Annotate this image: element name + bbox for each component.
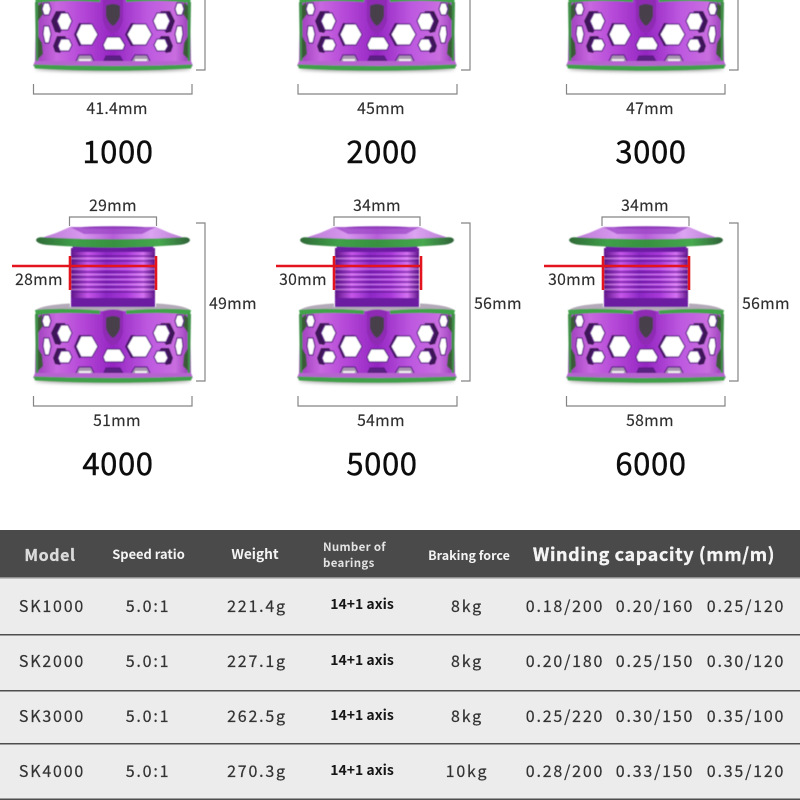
header: Weight: Weight xyxy=(231,543,279,563)
spool 6000 xyxy=(566,226,726,384)
specification table xyxy=(0,530,800,800)
row SK3000 xyxy=(19,703,785,727)
label 56mm spool 5000: 56mm xyxy=(474,291,522,314)
label 47mm: 47mm xyxy=(626,96,674,119)
row SK3000: 0.25/220 xyxy=(526,703,604,727)
label 56mm spool 6000: 56mm xyxy=(742,291,790,314)
label 28mm: 28mm xyxy=(15,267,63,290)
row SK4000: 5.0:1 xyxy=(126,758,170,782)
header: Number of bearings: bearings xyxy=(323,555,375,571)
row SK3000: 5.0:1 xyxy=(126,703,170,727)
label 49mm: 49mm xyxy=(209,291,257,314)
row SK4000: 0.35/120 xyxy=(707,758,785,782)
header: Speed ratio: Speed ratio xyxy=(112,544,185,563)
row SK2000: 5.0:1 xyxy=(126,648,170,672)
row SK4000: 0.33/150 xyxy=(616,758,694,782)
row SK1000: 5.0:1 xyxy=(126,593,170,617)
spool 4000 xyxy=(33,226,193,384)
row SK1000 xyxy=(19,593,785,617)
row SK1000: 0.18/200 xyxy=(526,593,604,617)
label 34mm spool 5000: 34mm xyxy=(353,193,401,216)
row SK3000: SK3000 xyxy=(19,703,85,727)
label 51mm: 51mm xyxy=(93,408,141,431)
header: Braking force: Braking force xyxy=(428,545,510,564)
heading 4000: 4000 xyxy=(82,439,154,484)
row SK4000: 10kg xyxy=(446,758,488,782)
row SK2000: 0.20/180 xyxy=(526,648,604,672)
row SK3000: 262.5g xyxy=(227,703,287,727)
row SK4000: SK4000 xyxy=(19,758,85,782)
header: Winding capacity: Winding capacity (mm/m) xyxy=(533,541,775,567)
row SK3000: 0.30/150 xyxy=(616,703,694,727)
heading 3000: 3000 xyxy=(615,127,687,172)
row SK4000 xyxy=(19,758,785,782)
heading 6000: 6000 xyxy=(615,439,687,484)
spool 2000 cropped at top xyxy=(297,0,457,72)
red measure lines xyxy=(12,256,689,290)
row SK1000: SK1000 xyxy=(19,593,85,617)
label 54mm: 54mm xyxy=(357,408,405,431)
heading 1000: 1000 xyxy=(82,127,154,172)
row SK2000: 8kg xyxy=(451,648,483,672)
label 30mm spool 6000: 30mm xyxy=(548,267,596,290)
header: Model: Model xyxy=(24,542,76,566)
label 29mm: 29mm xyxy=(89,193,137,216)
table header bar xyxy=(0,530,800,577)
row SK2000: 0.30/120 xyxy=(707,648,785,672)
spool 1000 cropped at top xyxy=(33,0,193,72)
row SK2000: 14+1 axis xyxy=(330,650,394,670)
row SK1000: 8kg xyxy=(451,593,483,617)
row SK4000: 14+1 axis xyxy=(330,760,394,780)
row SK2000: SK2000 xyxy=(19,648,85,672)
label 41.4mm: 41.4mm xyxy=(86,96,148,119)
header: Number of bearings: Number of xyxy=(323,539,386,555)
row SK1000: 14+1 axis xyxy=(330,594,394,614)
label 45mm: 45mm xyxy=(357,96,405,119)
heading 5000: 5000 xyxy=(346,439,418,484)
row SK1000: 0.20/160 xyxy=(616,593,694,617)
row SK2000: 0.25/150 xyxy=(616,648,694,672)
row SK1000: 0.25/120 xyxy=(707,593,785,617)
label 34mm spool 6000: 34mm xyxy=(621,193,669,216)
row SK2000 xyxy=(19,648,785,672)
row SK4000: 0.28/200 xyxy=(526,758,604,782)
row SK3000: 0.35/100 xyxy=(707,703,785,727)
spool 3000 cropped at top xyxy=(566,0,726,72)
row SK1000: 221.4g xyxy=(227,593,287,617)
spool 5000 xyxy=(297,226,457,384)
heading 2000: 2000 xyxy=(346,127,418,172)
label 58mm: 58mm xyxy=(626,408,674,431)
row SK4000: 270.3g xyxy=(227,758,287,782)
label 30mm spool 5000: 30mm xyxy=(279,267,327,290)
row SK3000: 14+1 axis xyxy=(330,705,394,725)
row SK3000: 8kg xyxy=(451,703,483,727)
row SK2000: 227.1g xyxy=(227,648,287,672)
